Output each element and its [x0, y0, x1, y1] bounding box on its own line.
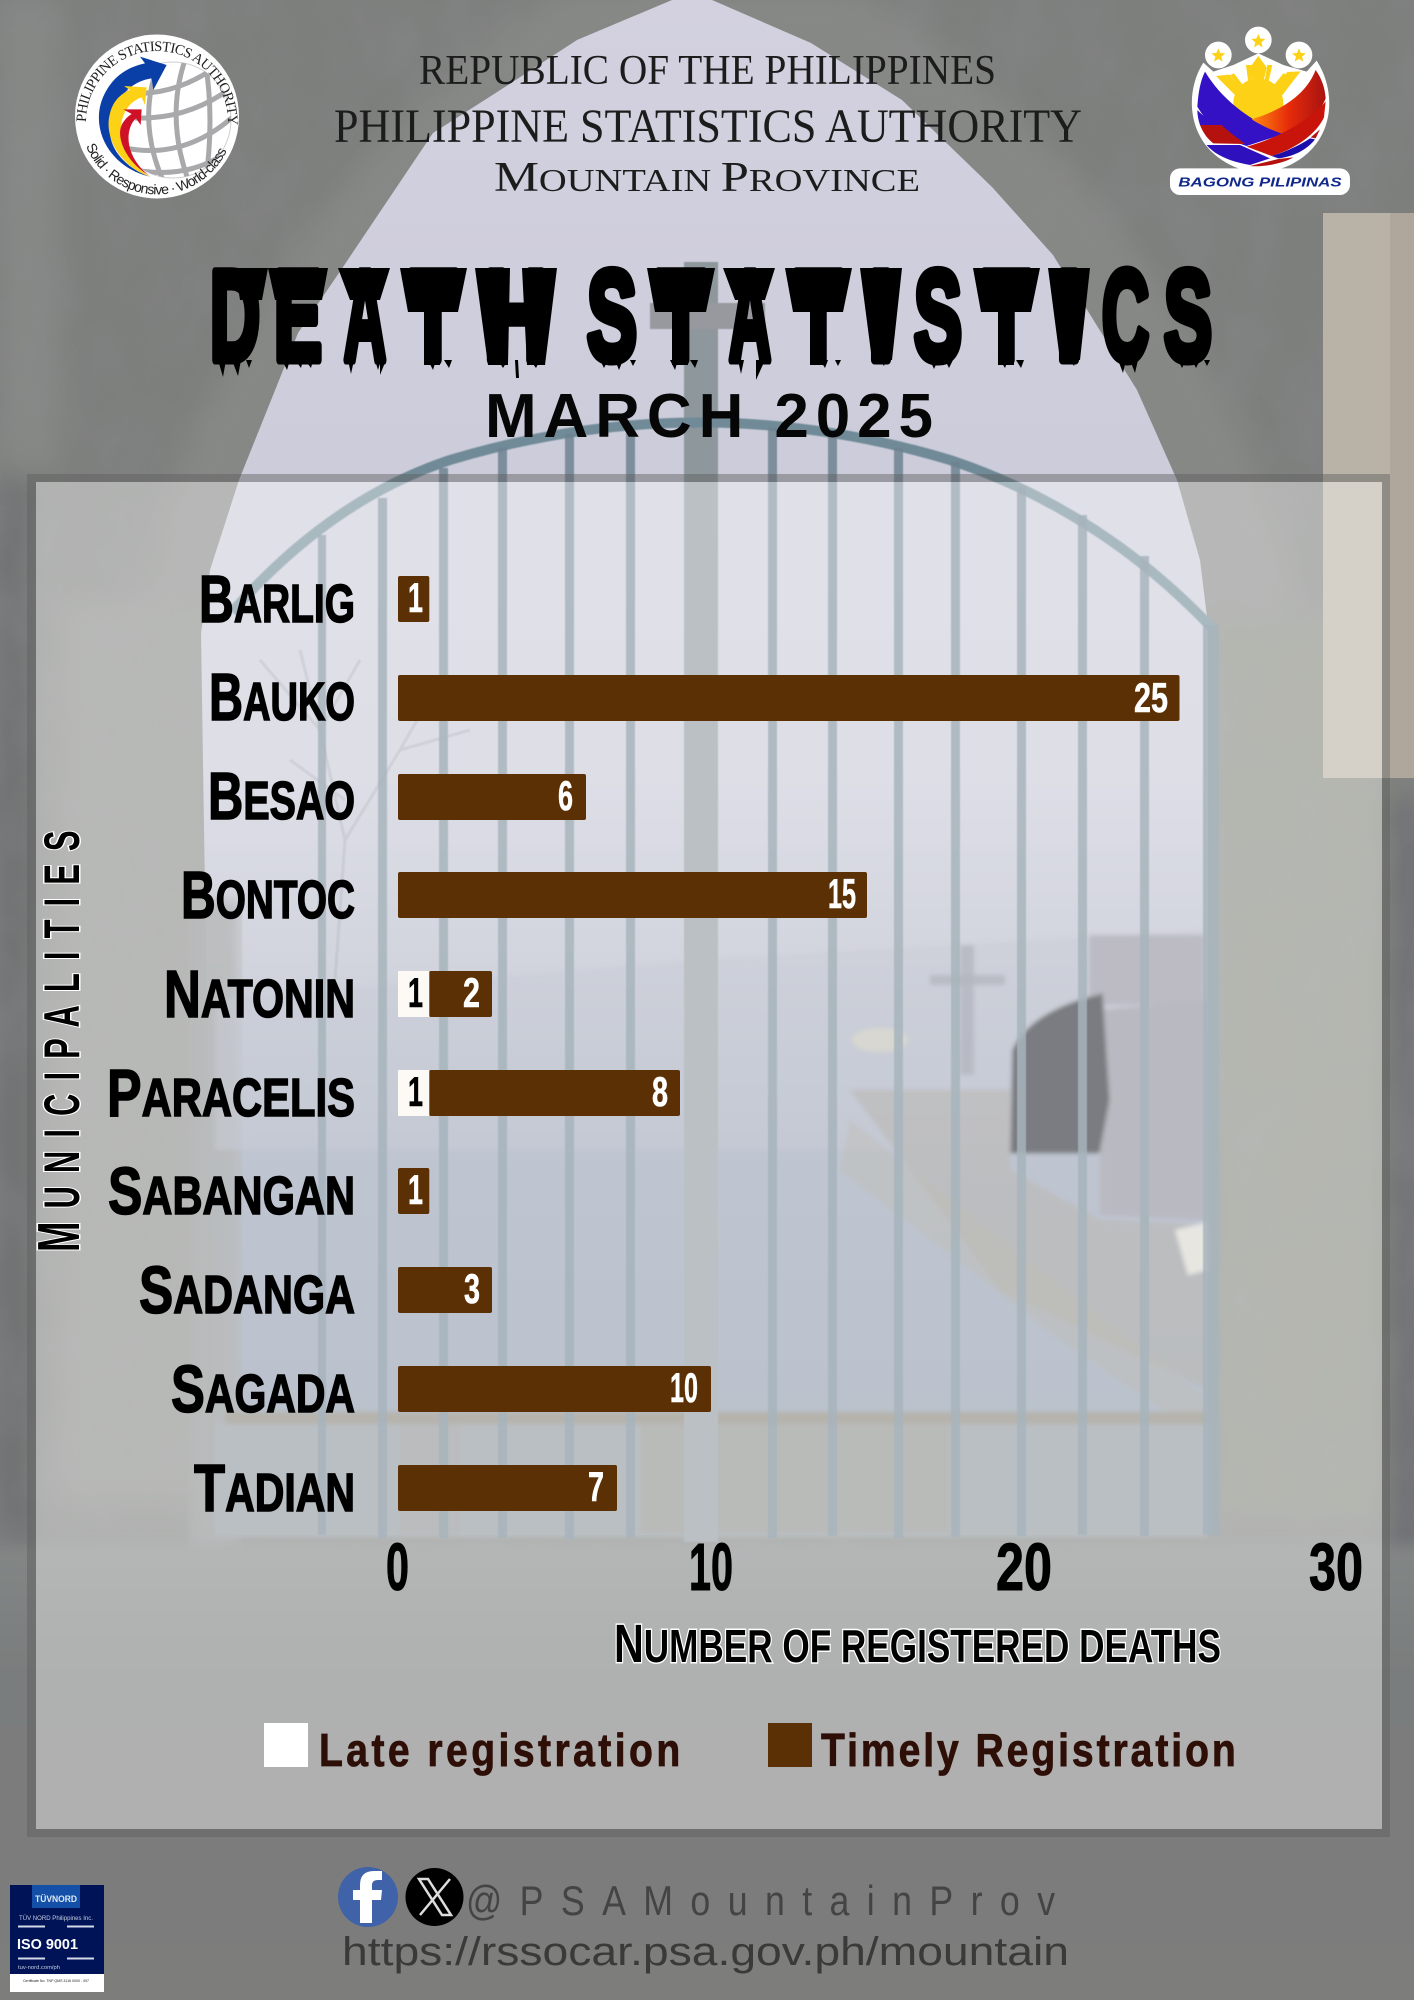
title: Death Statistics: T: [983, 245, 1030, 388]
municipality labels: BESAO: [208, 759, 355, 834]
title: Death Statistics: S: [1164, 245, 1212, 388]
bar chart: registered deaths by municipality: 2: [463, 969, 480, 1016]
icon: Facebook: [338, 1867, 398, 1927]
bare tree: [260, 650, 470, 980]
bar chart: registered deaths by municipality: 3: [464, 1265, 480, 1312]
title: Death Statistics: I: [868, 245, 894, 388]
title: Death Statistics: E: [274, 245, 322, 388]
x-axis tick labels: 20: [996, 1530, 1052, 1605]
title: Death Statistics: [210, 245, 1212, 388]
website url: https://rssocar.psa.gov.ph/mountain: [342, 1930, 1069, 1974]
title: Death Statistics: A: [344, 245, 386, 388]
badge: TÜV NORD ISO 9001: Certificate No. TNP QMS 3116 0000 - 097: [23, 1979, 89, 1983]
header: agency names: REPUBLIC OF THE PHILIPPINES: [419, 48, 996, 94]
bar chart: registered deaths by municipality: 7: [588, 1463, 604, 1510]
left wall edge fade: [190, 900, 240, 1550]
cemetery haze details: [215, 930, 1208, 1440]
beige wall paper at right: [1323, 213, 1414, 778]
municipality labels: SAGADA: [171, 1352, 355, 1427]
municipality labels: BAUKO: [209, 660, 355, 735]
legend: Timely Registration: [821, 1725, 1236, 1777]
bar chart: registered deaths by municipality: 10: [670, 1364, 698, 1411]
title: Death Statistics: A: [729, 245, 771, 388]
municipality labels: SABANGAN: [108, 1154, 355, 1229]
badge: TÜV NORD ISO 9001: ISO 9001: [17, 1936, 78, 1953]
logo: Bagong Pilipinas: [1170, 27, 1350, 195]
flared letter tops: [235, 268, 1090, 365]
title: Death Statistics: T: [795, 245, 842, 388]
badge: TÜV NORD ISO 9001: TÜVNORD: [35, 1894, 77, 1904]
badge: TÜV NORD ISO 9001: TÜV NORD Philippines Inc.: [19, 1915, 93, 1922]
logo: Philippine Statistics Authority seal: Solid · Responsive · World-class: [87, 144, 226, 194]
social handle: @PSAMountainProv: [466, 1878, 1056, 1925]
title: Death Statistics: S: [587, 245, 637, 388]
badge: TÜV NORD ISO 9001: tuv-nord.com/ph: [18, 1965, 60, 1971]
header: agency names: [334, 48, 1082, 201]
municipality labels: BONTOC: [181, 858, 355, 933]
title: Death Statistics: C: [1102, 245, 1149, 388]
title: Death Statistics: D: [210, 245, 260, 388]
bar chart: registered deaths by municipality: 8: [652, 1068, 668, 1115]
municipality labels: NATONIN: [164, 957, 355, 1032]
municipality labels: SADANGA: [139, 1253, 355, 1328]
municipality labels: PARACELIS: [107, 1056, 355, 1131]
x-axis tick labels: 30: [1309, 1530, 1363, 1605]
title: Death Statistics: H: [484, 245, 548, 388]
legend: [264, 1723, 1236, 1777]
subtitle: March 2025: MARCH 2025: [485, 382, 933, 451]
x-axis tick labels: 10: [689, 1530, 733, 1605]
bar chart: registered deaths by municipality: 1: [408, 969, 423, 1016]
title: Death Statistics: S: [914, 245, 962, 388]
rusty lower gate and ground: [215, 1412, 1210, 1537]
panel: chart backdrop: [27, 474, 1390, 1837]
x-axis tick labels: 0: [386, 1530, 409, 1605]
logo: Bagong Pilipinas: BAGONG PILIPINAS: [1178, 175, 1342, 190]
y-axis title: MUNICIPALITIES: [27, 830, 92, 1252]
bar chart: registered deaths by municipality: 15: [828, 870, 856, 917]
logo: Philippine Statistics Authority seal: PHILIPPINE STATISTICS AUTHORITY: [76, 41, 238, 125]
bar chart: registered deaths by municipality: 25: [1134, 674, 1168, 721]
title: Death Statistics: T: [410, 245, 457, 388]
bar chart: registered deaths by municipality: 6: [558, 772, 573, 819]
logo: Philippine Statistics Authority seal: [75, 34, 239, 198]
bar chart: registered deaths by municipality: 1: [408, 574, 423, 621]
icon: X: [406, 1868, 464, 1926]
legend: Late registration: [319, 1725, 680, 1777]
header: agency names: MOUNTAIN PROVINCE: [494, 155, 920, 201]
municipality labels: BARLIG: [199, 562, 355, 637]
municipality labels: TADIAN: [194, 1451, 355, 1526]
cross and gate bars: [232, 262, 1219, 1542]
x-axis title: NUMBER OF REGISTERED DEATHS: [614, 1614, 1221, 1674]
title: Death Statistics: T: [657, 245, 705, 388]
header: agency names: PHILIPPINE STATISTICS AUTHORITY: [334, 100, 1082, 153]
bar chart: registered deaths by municipality: 1: [408, 1166, 423, 1213]
title: Death Statistics: I: [1056, 245, 1082, 388]
x-axis tick labels: [386, 1530, 1363, 1605]
municipality labels: [107, 562, 355, 1526]
bar chart: registered deaths by municipality: 1: [408, 1068, 423, 1115]
bar chart: registered deaths by municipality: [398, 574, 1180, 1511]
badge: TÜV NORD ISO 9001: [10, 1885, 104, 1992]
